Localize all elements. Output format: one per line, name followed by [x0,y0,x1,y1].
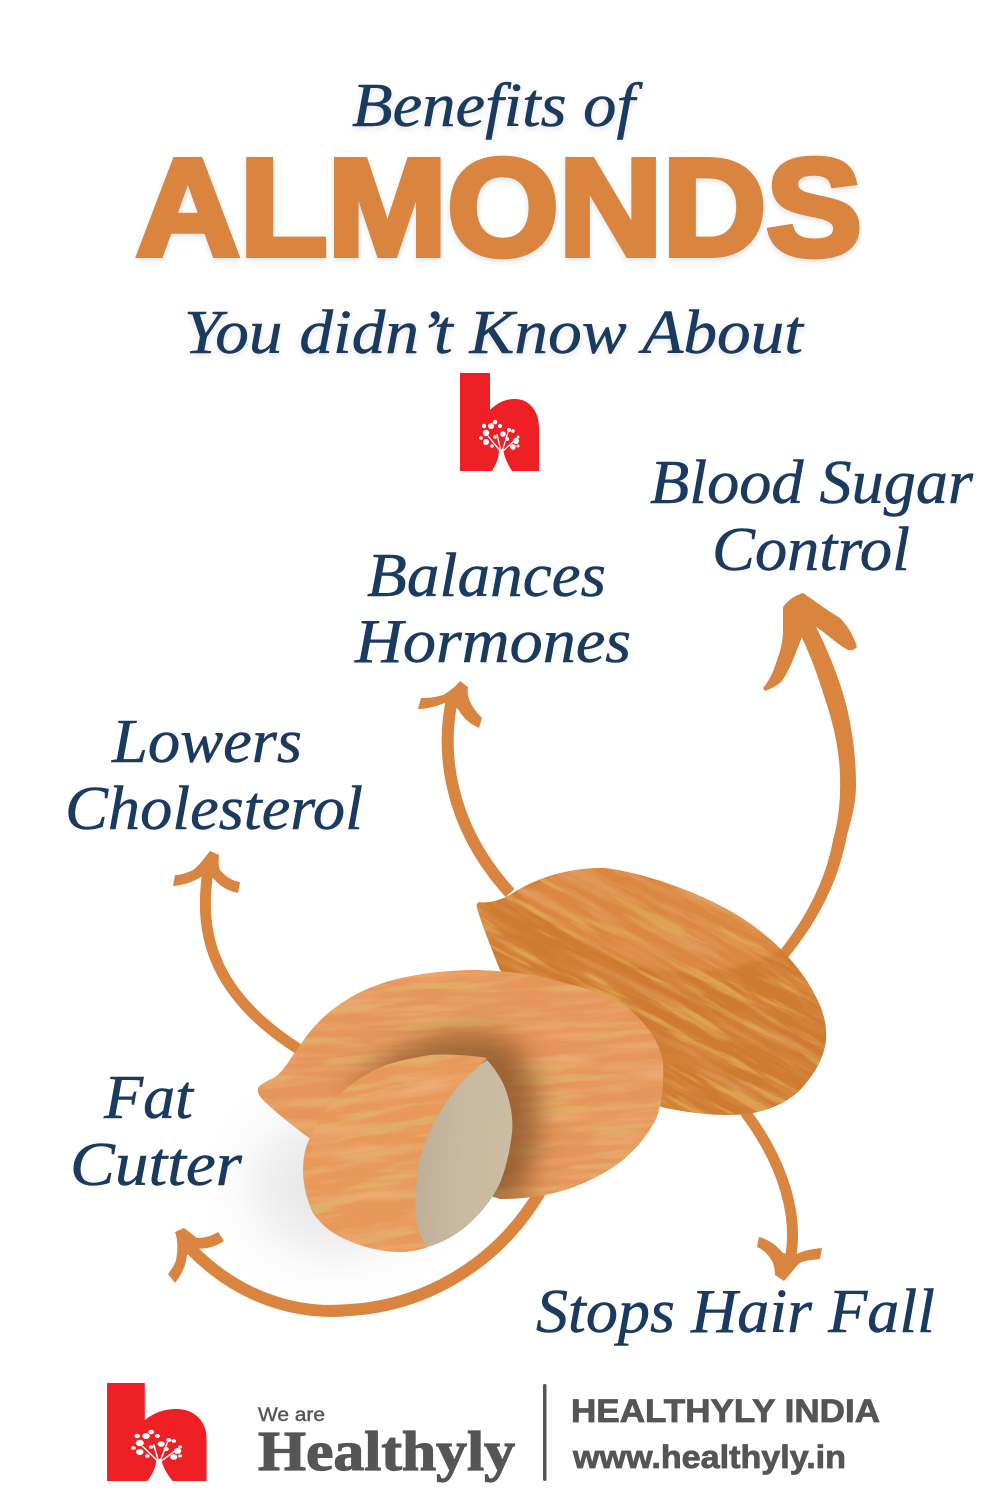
heading: You didn't Know About: You didn’t Know About [184,299,805,367]
arrow: to Fat Cutter [168,1192,540,1311]
label: Balances Hormones [354,542,631,676]
label: Fat Cutter [70,1064,243,1199]
almond: back [476,868,826,1115]
text: HEALTHYLY INDIA: HEALTHYLY INDIA [571,1393,880,1429]
arrow: to Stops Hair Fall [745,1112,822,1281]
arrow: to Lowers Cholesterol [173,851,300,1050]
text: Healthyly: Healthyly [258,1421,515,1483]
label: Fat Cutter: Fat [103,1064,195,1132]
illustration: almonds [248,868,826,1260]
label: Blood Sugar Control [650,449,974,584]
label: Blood Sugar Control: Blood Sugar [650,449,974,517]
soft shadow [250,1115,420,1255]
label: Blood Sugar Control: Control [712,516,910,584]
label: Balances Hormones: Hormones [354,608,631,676]
title [136,72,862,367]
divider [543,1384,546,1481]
text: website: www.healthyly.in [572,1439,846,1475]
arrow: to Balances Hormones [418,681,510,893]
label: Lowers Cholesterol: Lowers [111,708,302,776]
arrow: to Blood Sugar Control [763,593,857,960]
label: Lowers Cholesterol: Cholesterol [65,775,363,843]
almond: front whole [258,970,664,1199]
logo: footer h mark [107,1383,207,1481]
label: Lowers Cholesterol [65,708,363,843]
footer [107,1383,880,1483]
heading: ALMONDS: ALMONDS [136,131,862,285]
heading: Benefits of: Benefits of [352,72,643,140]
almond: kernel [416,1060,512,1247]
label: Fat Cutter: Cutter [70,1131,243,1199]
text: We are: We are [258,1405,325,1426]
label: Stops Hair Fall: Stops Hair Fall [536,1278,935,1346]
logo: Healthyly h mark [460,373,539,471]
almond: front cut half [303,1054,487,1252]
label: Balances Hormones: Balances [367,542,606,610]
